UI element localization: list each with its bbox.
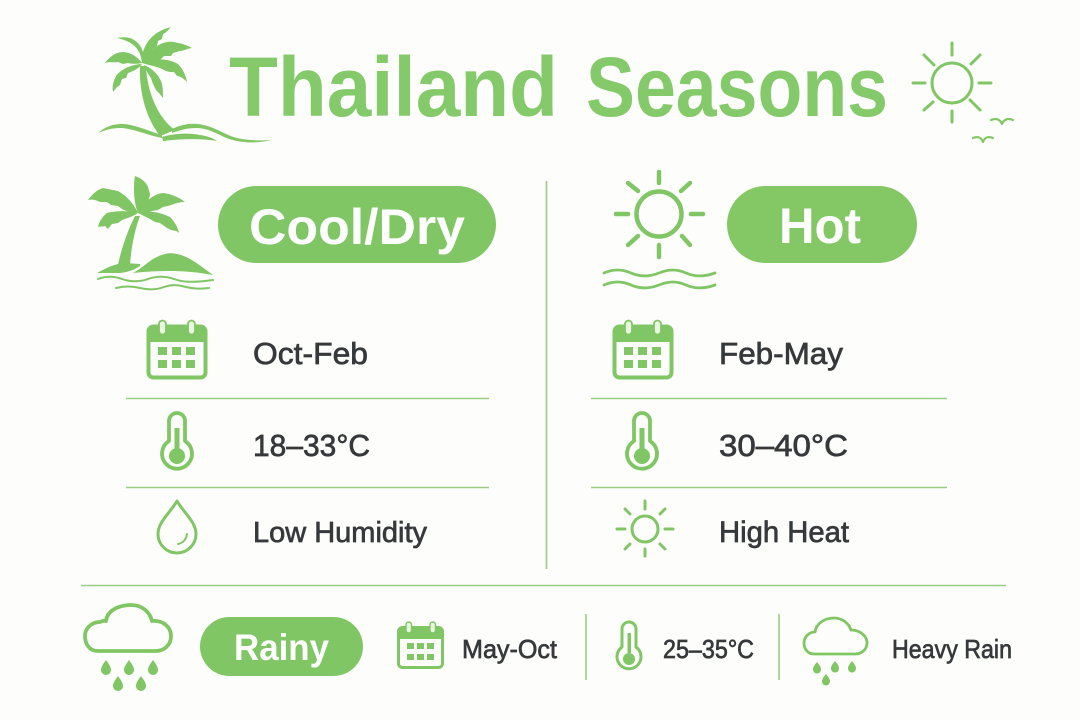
icon: island palm tree xyxy=(88,176,213,289)
title: Seasons xyxy=(586,40,888,134)
row: heat xyxy=(617,501,850,556)
panel: Hot xyxy=(591,172,947,556)
text: temperature: 18–33°C xyxy=(253,428,370,463)
row: months xyxy=(614,320,843,378)
icon: thermometer xyxy=(162,413,192,469)
item: rain xyxy=(804,618,1012,686)
icon: calendar xyxy=(148,320,206,378)
row: temperature xyxy=(162,413,370,469)
icon: rain cloud xyxy=(804,618,867,686)
text: temperature: 30–40°C xyxy=(719,428,848,463)
icon: thermometer xyxy=(627,413,657,469)
text: months: Oct-Feb xyxy=(253,336,368,371)
text: temperature: 25–35°C xyxy=(663,634,754,664)
icon: small sun xyxy=(617,501,673,556)
badge: Hot xyxy=(727,186,917,263)
title: Thailand xyxy=(229,40,558,134)
icon: calendar xyxy=(614,320,672,378)
icon: title palm tree xyxy=(98,27,272,142)
icon: calendar xyxy=(398,622,443,668)
row: months xyxy=(148,320,368,378)
item: temperature xyxy=(617,622,754,669)
icon: sun over waves xyxy=(604,172,715,288)
panel: Rainy xyxy=(85,605,1012,691)
item: months xyxy=(398,622,558,668)
badge: Cool/Dry: Cool/Dry xyxy=(249,199,465,255)
badge: Rainy: Rainy xyxy=(234,627,329,668)
icon: thermometer xyxy=(617,622,641,669)
icon: birds xyxy=(973,119,1013,142)
icon: water drop xyxy=(158,501,196,553)
panel: Cool/Dry xyxy=(88,176,496,553)
icon: rain cloud xyxy=(85,605,171,691)
text: humidity: Low Humidity xyxy=(253,517,427,549)
text: heat: High Heat xyxy=(719,516,850,549)
title xyxy=(229,40,888,134)
badge: Cool/Dry xyxy=(218,186,496,263)
badge: Rainy xyxy=(200,617,363,676)
row: temperature xyxy=(627,413,848,469)
text: rain: Heavy Rain xyxy=(892,634,1012,664)
icon: title sun xyxy=(913,43,991,122)
text: months: Feb-May xyxy=(719,336,843,371)
vertical divider xyxy=(546,181,548,569)
text: months: May-Oct xyxy=(462,634,558,664)
row: humidity xyxy=(158,501,427,553)
badge: Hot: Hot xyxy=(779,198,861,254)
